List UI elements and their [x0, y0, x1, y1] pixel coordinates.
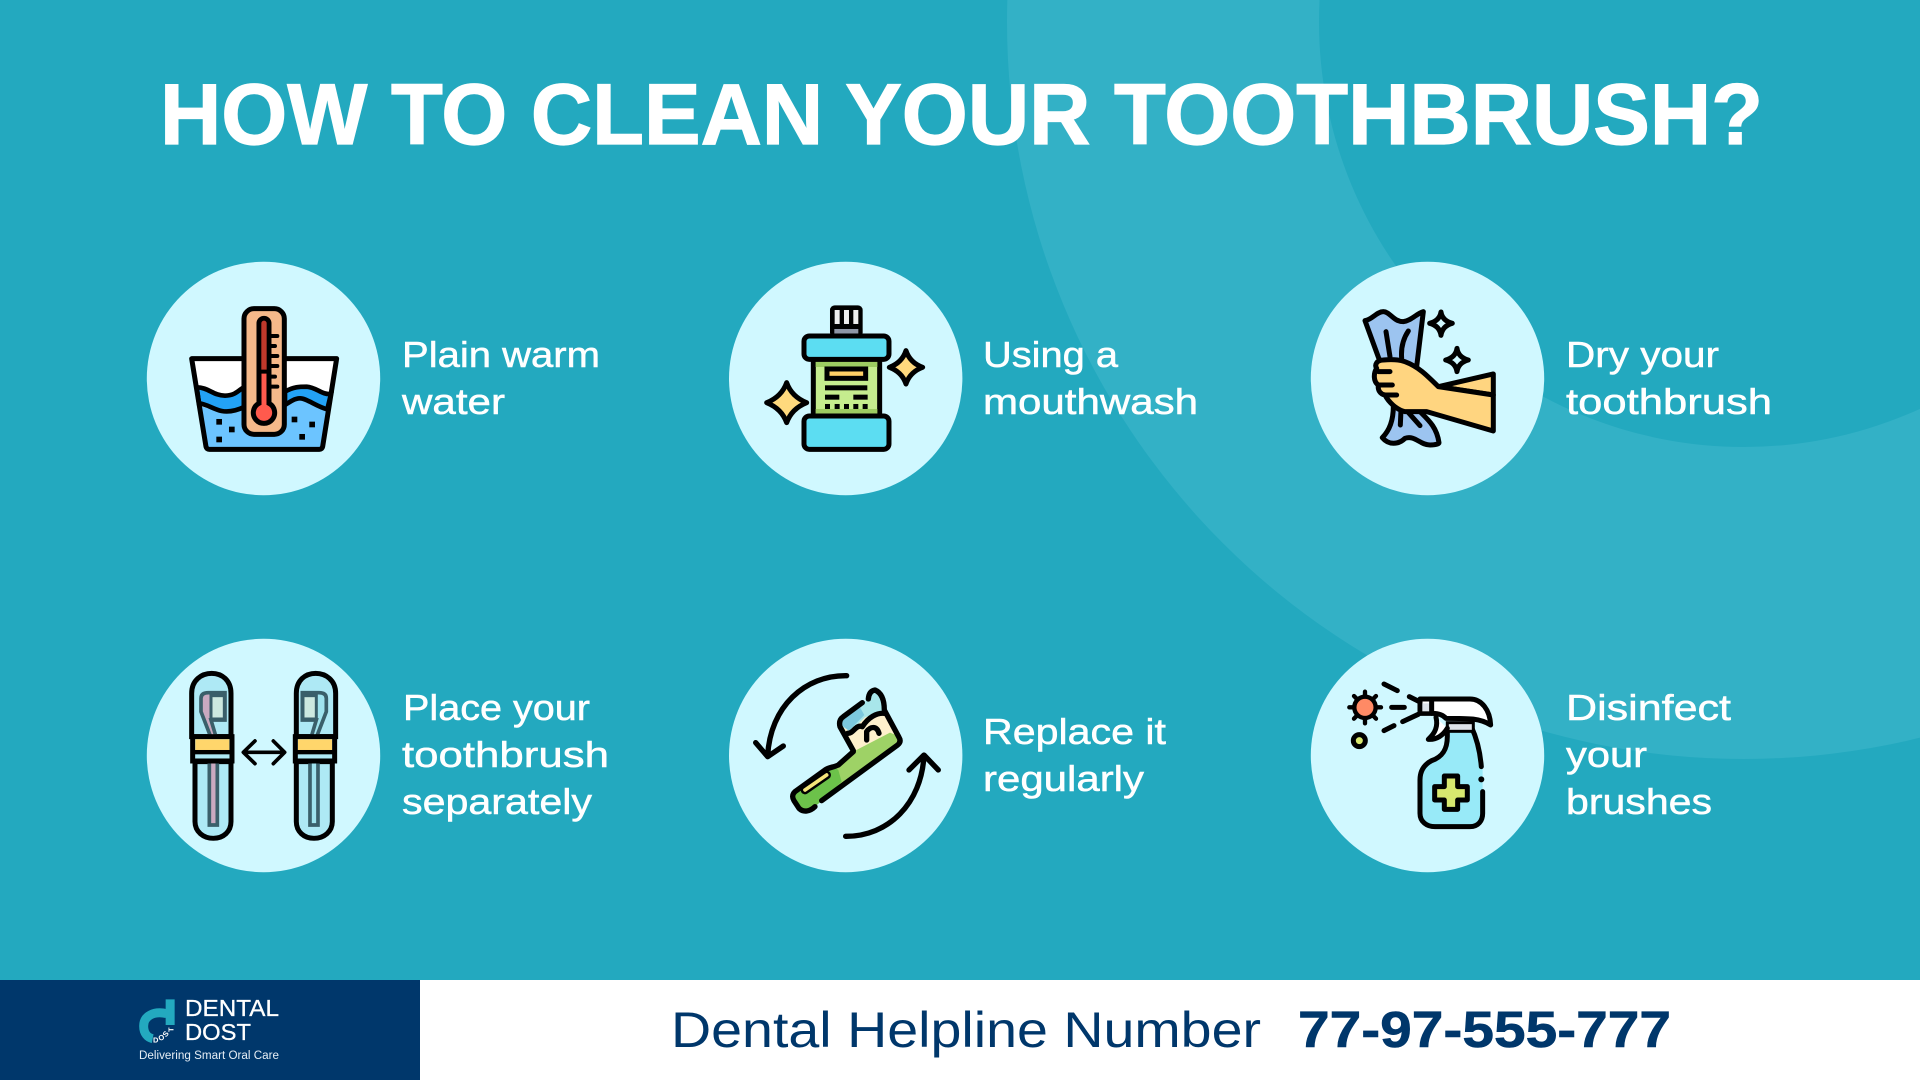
footer: logo panel: D	[153, 1036, 159, 1044]
text: replace it regularly: Replace it	[983, 711, 1166, 752]
text: place your toothbrush separately: Place your	[403, 687, 590, 728]
icon: hand wringing towel	[1365, 312, 1493, 445]
text: replace it regularly: regularly	[983, 758, 1144, 799]
logo mark	[144, 999, 175, 1039]
text: using a mouthwash: Using a	[983, 334, 1119, 375]
text: dry your toothbrush	[1566, 334, 1772, 422]
footer: logo panel: O	[157, 1032, 166, 1043]
text: place your toothbrush separately	[402, 687, 609, 822]
text: place your toothbrush separately: toothbrush	[402, 734, 609, 775]
item: replace it regularly	[729, 639, 1166, 872]
icon: toothbrush travel cases	[192, 673, 336, 838]
text: using a mouthwash: mouthwash	[983, 381, 1198, 422]
text: plain warm water: water	[401, 381, 505, 422]
item: dry your toothbrush	[1311, 262, 1772, 495]
item: using a mouthwash	[729, 262, 1198, 495]
footer: logo panel	[0, 980, 420, 1080]
text: place your toothbrush separately: separately	[402, 781, 592, 822]
text: dry your toothbrush: toothbrush	[1566, 381, 1772, 422]
title: HOW TO CLEAN YOUR TOOTHBRUSH?	[160, 67, 1763, 163]
text: using a mouthwash	[983, 334, 1198, 422]
text: plain warm water	[401, 334, 600, 422]
helpline number: 77-97-555-777	[1298, 1001, 1671, 1058]
item: place your toothbrush separately	[147, 639, 609, 872]
footer: helpline bar	[420, 980, 1920, 1080]
logo wordmark: DENTAL	[185, 995, 279, 1021]
icon: mouthwash bottle	[767, 305, 923, 449]
helpline label: Dental Helpline Number	[671, 1002, 1261, 1058]
text: disinfect your brushes: your	[1566, 734, 1647, 775]
text: replace it regularly	[983, 711, 1166, 799]
logo tagline: Delivering Smart Oral Care	[139, 1050, 279, 1062]
footer: logo panel: T	[166, 1027, 176, 1032]
item: disinfect your brushes	[1311, 639, 1731, 872]
text: disinfect your brushes	[1566, 687, 1731, 822]
text: disinfect your brushes: Disinfect	[1566, 687, 1731, 728]
footer: logo panel: S	[161, 1029, 171, 1039]
icon: toothbrush with replace arrows	[756, 676, 938, 836]
icon: disinfectant spray bottle	[1349, 684, 1491, 827]
item: plain warm water	[147, 262, 600, 495]
footer: logo panel: DOST	[185, 1019, 251, 1045]
text: dry your toothbrush: Dry your	[1566, 334, 1719, 375]
text: plain warm water: Plain warm	[402, 334, 600, 375]
icon: basin with thermometer	[192, 309, 337, 449]
text: disinfect your brushes: brushes	[1566, 781, 1712, 822]
